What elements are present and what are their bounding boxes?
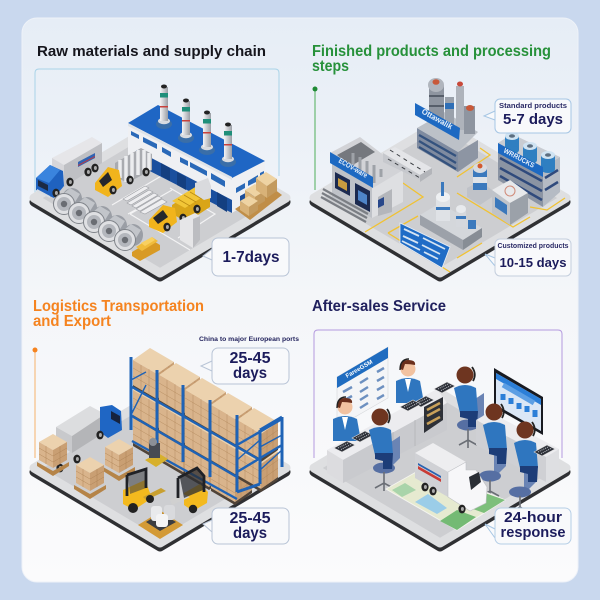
callout: 1-7 days: 1-7days <box>222 249 280 266</box>
pallet on truck <box>37 434 69 476</box>
marker line: finished products <box>312 86 318 190</box>
white racks <box>383 147 432 182</box>
platform <box>34 123 286 277</box>
callout: 24-hour response: response <box>500 524 566 541</box>
left service desk <box>327 389 447 483</box>
yellow logs truck <box>149 178 211 233</box>
delivery van <box>415 443 487 513</box>
heading: logistics <box>33 298 204 330</box>
front plant <box>420 182 482 250</box>
agent: front centre <box>396 359 424 403</box>
callout: customized products: 10-15 days <box>500 255 566 270</box>
steel pipes <box>321 189 368 222</box>
heading: after-sales: After-sales Service <box>312 298 446 315</box>
callout: shipping days top: days <box>233 365 267 382</box>
chimneys <box>156 84 236 167</box>
callout: shipping days top <box>201 348 289 384</box>
left building: ECOV-ware <box>337 156 369 180</box>
right rack with tanks: WRRUCKS <box>502 148 536 170</box>
label: China to major European ports: China to major European ports <box>199 336 300 343</box>
drum pallet <box>138 505 183 539</box>
callout: shipping days top: 25-45 <box>230 350 271 367</box>
callout: shipping days bottom <box>203 508 289 544</box>
center machine <box>467 163 492 205</box>
yellow tanker truck <box>95 148 152 197</box>
heading: finished products <box>312 43 551 75</box>
callout: 1-7 days <box>203 238 289 276</box>
keyboards on left desk <box>334 396 434 452</box>
callout: customized products: Customized products <box>498 241 568 250</box>
callout: standard products: Standard products <box>499 101 567 110</box>
factory building <box>128 105 265 213</box>
platform <box>314 393 566 547</box>
pallet stack back <box>103 439 135 481</box>
agent: seated at desk with chair <box>369 408 400 491</box>
agent: back view two with chair <box>509 422 555 515</box>
platform <box>34 393 286 547</box>
platform <box>314 123 566 277</box>
floor markings <box>112 172 215 250</box>
panel: raw materials and supply chain <box>34 43 289 277</box>
warehouse rack <box>131 348 282 505</box>
panel: after-sales service <box>312 298 571 547</box>
tower banner: Ottawalik <box>420 107 455 131</box>
delivery truck <box>56 405 122 472</box>
tower plant <box>417 78 478 172</box>
right service desk <box>476 412 559 482</box>
heading: logistics: and Export <box>33 313 111 330</box>
blue truck <box>36 137 102 198</box>
marker line: logistics <box>32 348 38 458</box>
forklift left <box>123 469 166 513</box>
wooden pallets <box>235 172 282 220</box>
pallet stack front <box>74 457 106 499</box>
forklift right <box>170 468 208 513</box>
heading: finished products: Finished products and processing <box>312 43 551 60</box>
display board: FareeGSM <box>345 360 374 380</box>
agent: back view one with chair <box>479 404 507 499</box>
machine cube <box>492 180 528 225</box>
heading: raw materials: Raw materials and supply chain <box>37 43 266 60</box>
gold ingots <box>132 237 160 261</box>
information sign <box>400 223 450 268</box>
frame: after-sales <box>314 330 562 458</box>
callout: shipping days bottom: days <box>233 525 267 542</box>
panel: finished products and processing steps <box>312 43 571 277</box>
callout: 24-hour response <box>485 508 571 544</box>
right rack with tanks <box>498 132 560 207</box>
heading: finished products: steps <box>312 58 349 75</box>
callout: shipping days bottom: 25-45 <box>230 510 271 527</box>
callout: customized products <box>485 239 571 276</box>
grey container <box>180 213 200 248</box>
steel coils <box>54 188 143 250</box>
callout: standard products <box>484 99 571 133</box>
display board <box>337 347 388 420</box>
steel ingots <box>123 186 167 214</box>
yellow floor lines <box>365 148 565 272</box>
callout: standard products: 5-7 days <box>503 112 563 128</box>
left building <box>330 137 403 218</box>
heading: logistics: Logistics Transportation <box>33 298 204 315</box>
robot <box>145 438 168 467</box>
agent: front left <box>333 397 361 441</box>
panel: logistics transportation and export <box>32 298 300 547</box>
wall monitor <box>494 368 543 435</box>
callout: 24-hour response: 24-hour <box>504 509 562 526</box>
frame: raw materials <box>35 69 279 196</box>
city map <box>386 467 505 530</box>
tower banner <box>415 103 460 140</box>
agent: right of desk with chair <box>434 366 484 448</box>
